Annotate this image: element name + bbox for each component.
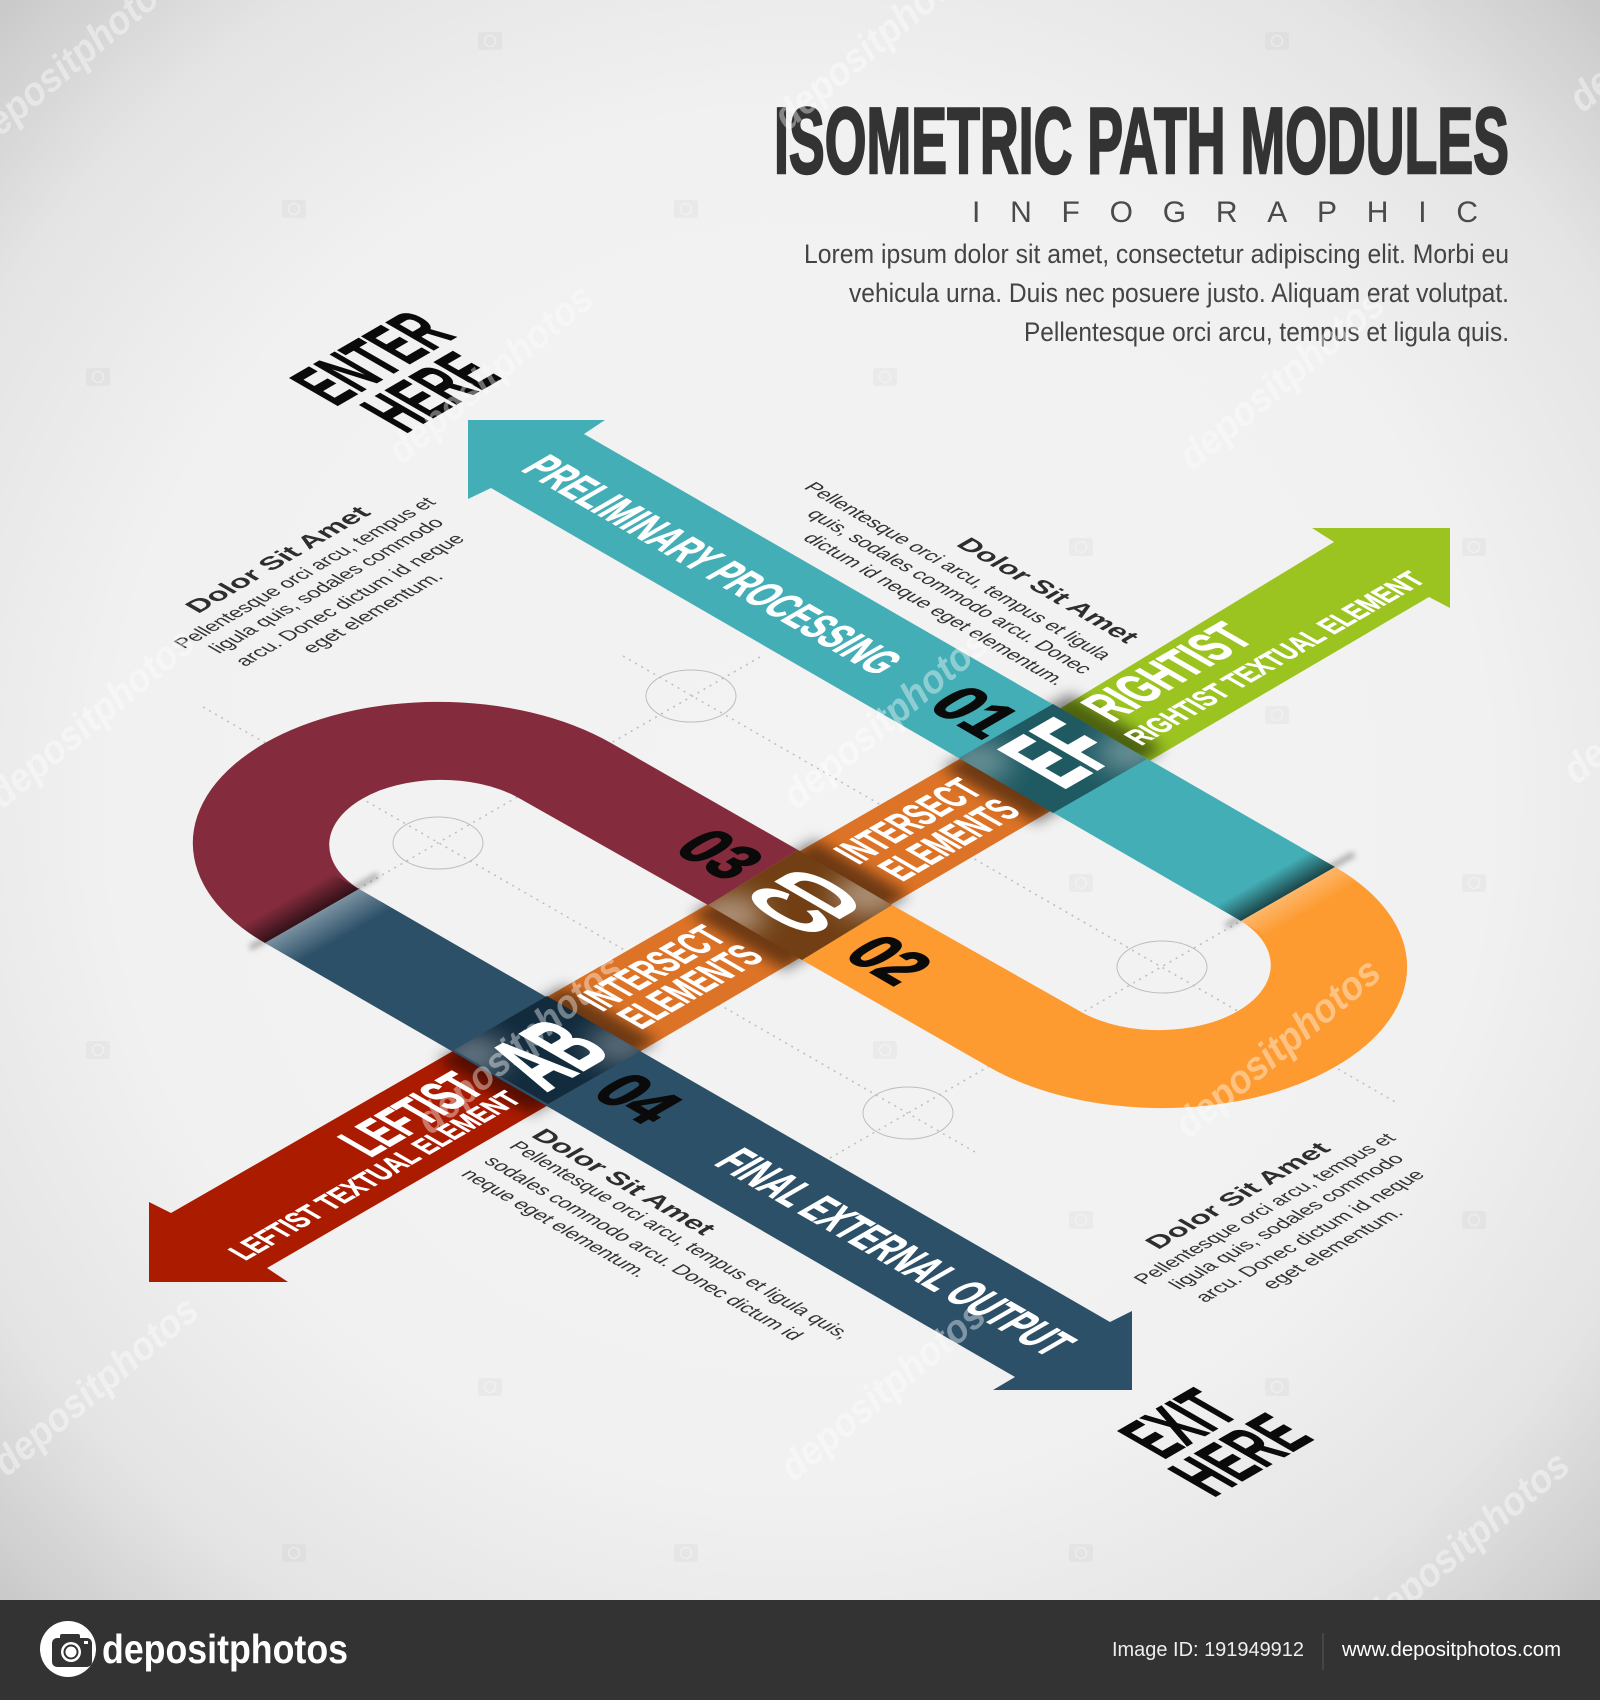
footer bar — [0, 1600, 1600, 1700]
junction wedge shadows — [250, 854, 1354, 948]
caption: top left: Dolor Sit Amet — [179, 502, 378, 617]
diagonal stock watermarks: depositphotos — [408, 946, 631, 1143]
path: teal arrow 01 — [468, 420, 1335, 921]
path: maroon curve 03 — [193, 702, 798, 943]
caption: top centre: dictum id neque eget elementum. — [798, 530, 1071, 689]
label: leftist: LEFTIST — [326, 1065, 498, 1165]
diagonal stock watermarks: depositphotos — [1170, 282, 1393, 479]
crossing shadows cast on the intersect band — [437, 694, 1164, 1114]
label: intersect elements lower — [568, 919, 774, 1035]
caption: top centre: Dolor Sit Amet — [950, 534, 1146, 647]
caption: bottom right: Pellentesque orci arcu, tempus et — [1129, 1130, 1402, 1288]
caption: bottom centre: Pellentesque orci arcu, tempus et ligula quis, — [504, 1138, 856, 1342]
label: intersect elements lower: INTERSECT — [568, 919, 737, 1017]
shadow at maroon end — [243, 876, 358, 943]
faint watermark camera icons — [86, 32, 1486, 1562]
caption: bottom right: Dolor Sit Amet — [1139, 1138, 1338, 1253]
caption: top centre: quis, sodales commodo arcu. Donec — [802, 506, 1097, 677]
site url: www.depositphotos.com — [1341, 1639, 1561, 1661]
construction guides: dotted axes and circles — [203, 656, 1397, 1158]
caption: top left: arcu. Donec dictum id neque — [230, 531, 470, 670]
label: preliminary processing: PRELIMINARY PROCESSING — [510, 449, 913, 682]
intro text block: Lorem ipsum dolor sit amet, consectetur adipiscing elit. Morbi eu — [804, 239, 1509, 269]
arrow: leftist red — [149, 1024, 595, 1282]
diagonal stock watermarks: depositphotos — [379, 276, 602, 473]
enter here label: ENTER — [273, 300, 472, 416]
arrow: rightist green — [1000, 528, 1450, 790]
caption: bottom centre: neque eget elementum. — [456, 1166, 653, 1281]
highlight at navy start — [265, 889, 393, 963]
label: CD: CD — [723, 854, 887, 950]
caption: bottom centre: Dolor Sit Amet — [525, 1125, 723, 1239]
caption: top left: Pellentesque orci arcu, tempus et — [169, 494, 442, 652]
label: rightist textual element: RIGHTIST TEXTUAL ELEMENT — [1117, 567, 1433, 750]
intro text block: Pellentesque orci arcu, tempus et ligula quis. — [1024, 317, 1509, 347]
label: intersect elements upper: INTERSECT — [824, 772, 993, 870]
crossing: EF — [959, 704, 1147, 813]
label: intersect elements lower: ELEMENTS — [607, 938, 774, 1035]
subtitle: INFOGRAPHIC — [972, 196, 1478, 229]
caption: bottom centre: sodales commodo arcu. Donec dictum id — [479, 1153, 808, 1344]
caption: top left: ligula quis, sodales commodo — [204, 515, 449, 657]
crossing: CD — [708, 850, 892, 960]
label: intersect elements upper: ELEMENTS — [868, 793, 1031, 887]
number 03: 03 — [659, 819, 780, 890]
logo wordmark: depositphotos — [102, 1626, 348, 1672]
image id: Image ID: 191949912 — [1112, 1639, 1304, 1661]
caption: top left: eget elementum. — [297, 569, 449, 657]
highlight at orange start — [1242, 867, 1356, 934]
label: rightist: RIGHTIST — [1068, 614, 1266, 729]
icon: camera logo — [40, 1621, 96, 1677]
caption: top centre: Pellentesque orci arcu, tempus et ligula — [799, 479, 1117, 663]
enter here label — [273, 300, 518, 443]
path: navy arrow 04 — [265, 889, 1132, 1390]
enter here label: HERE — [343, 341, 518, 443]
label: EF: EF — [975, 704, 1143, 802]
band: intersect elements orange — [500, 730, 1100, 1078]
label: intersect elements upper — [824, 772, 1031, 887]
diagonal stock watermarks: depositphotos — [771, 1293, 994, 1490]
crossing: AB — [454, 996, 641, 1104]
number 04: 04 — [577, 1063, 698, 1134]
label: leftist textual element: LEFTIST TEXTUAL ELEMENT — [221, 1086, 529, 1265]
intro text block: vehicula urna. Duis nec posuere justo. Aliquam erat volutpat. — [849, 278, 1509, 308]
exit here label: EXIT — [1101, 1378, 1257, 1469]
caption: bottom right: ligula quis, sodales commodo — [1164, 1151, 1409, 1293]
exit here label — [1101, 1378, 1330, 1507]
caption: bottom right: eget elementum. — [1257, 1205, 1409, 1293]
intersect band: orange, green arrow and red arrow — [149, 528, 1450, 1282]
number 01: 01 — [913, 676, 1036, 748]
intro text block — [804, 239, 1509, 347]
exit here label: HERE — [1151, 1403, 1330, 1507]
divider — [1322, 1633, 1324, 1670]
caption: bottom right: arcu. Donec dictum id neque — [1190, 1167, 1430, 1306]
shadow at teal end — [1210, 849, 1335, 921]
diagonal stock watermarks: depositphotos — [774, 621, 997, 818]
label: AB: AB — [464, 1005, 633, 1104]
diagonal stock watermarks: depositphotos — [1166, 950, 1389, 1147]
path: orange curve 02 — [802, 867, 1407, 1108]
number 02: 02 — [829, 925, 949, 995]
label: final external output: FINAL EXTERNAL OUTPUT — [703, 1141, 1087, 1363]
diagonal stock watermarks: depositphotos — [1355, 1443, 1578, 1640]
